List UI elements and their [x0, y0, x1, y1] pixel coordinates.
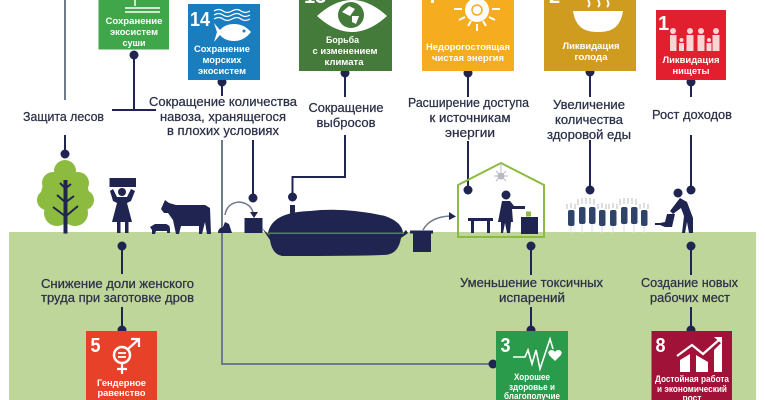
connector: women labour: [118, 242, 126, 334]
label: women labour: [41, 277, 194, 305]
SDG 1 card: нищеты: [672, 66, 710, 77]
label: healthy food: количества: [555, 113, 623, 127]
SDG 3 card: [496, 331, 568, 400]
label: income growth: Рост доходов: [652, 108, 732, 122]
label: healthy food: здоровой еды: [547, 128, 631, 142]
SDG 15 card: Сохранение: [106, 16, 162, 27]
label: toxic fumes: [460, 276, 604, 305]
SDG 1 card: Ликвидация: [662, 55, 720, 66]
SDG 14 card: 14: [190, 9, 211, 31]
SDG 14 card: морских: [202, 55, 242, 66]
connector: income: [686, 78, 696, 194]
label: new jobs: [641, 276, 739, 305]
SDG 2 card: [544, 0, 636, 71]
label: new jobs: рабочих мест: [650, 291, 730, 305]
ground panel: [9, 232, 756, 400]
SDG 5 card: [86, 331, 157, 400]
label: healthy food: [547, 98, 631, 142]
SDG 13 card: климата: [324, 57, 364, 68]
SDG 5 card: 5: [90, 335, 100, 357]
label: emissions reduction: выбросов: [316, 116, 376, 130]
icon: woman carrying wood: [110, 178, 136, 233]
label: women labour: Снижение доли женского: [41, 277, 194, 291]
label: manure reduction: Сокращение количества: [149, 95, 297, 109]
SDG 14 card: [188, 4, 260, 80]
label: emissions reduction: [308, 101, 384, 130]
label: energy access: [408, 96, 529, 140]
label: forest protection: Защита лесов: [23, 110, 104, 124]
label: manure reduction: в плохих условиях: [167, 124, 280, 138]
SDG 14 card: Сохранение: [194, 44, 250, 55]
icon: biogas digester: [262, 205, 408, 256]
connector: food: [586, 68, 594, 194]
SDG 14 card: экосистем: [198, 66, 246, 77]
SDG 1 card: [656, 10, 726, 80]
label: women labour: труда при заготовке дров: [41, 291, 194, 305]
SDG 15 card: суши: [122, 38, 146, 49]
connector: land ecosystems: [112, 50, 156, 110]
SDG 15 card: экосистем: [110, 27, 158, 38]
icon: outlet tank and arrow: [410, 212, 456, 252]
icon: tree: [37, 160, 94, 234]
label: manure reduction: навоза, хранящегося: [160, 110, 286, 124]
icon: green house with person: [458, 163, 544, 237]
SDG 8 card: 8: [656, 335, 666, 357]
SDG 5 card: Гендерное: [97, 378, 146, 389]
SDG 7 card: [422, 0, 514, 71]
SDG 2 card: Ликвидация: [562, 41, 620, 52]
connector: toxic fumes: [526, 242, 536, 334]
SDG 13 card: Борьба: [326, 35, 360, 46]
icon: pig: [150, 224, 170, 234]
label: emissions reduction: Сокращение: [308, 101, 384, 115]
SDG 3 card: Хорошее: [514, 372, 550, 383]
SDG 2 card: голода: [574, 52, 608, 63]
label: toxic fumes: испарений: [499, 291, 565, 305]
icon: farmer with watering can: [655, 188, 693, 233]
connector: marine and manure: [218, 78, 498, 368]
label: energy access: Расширение доступа: [408, 96, 529, 110]
SDG 3 card: здоровье и: [509, 382, 555, 393]
label: manure reduction: [149, 95, 297, 138]
connector: climate: [288, 68, 350, 202]
label: energy access: энергии: [445, 126, 495, 140]
SDG 13 card: [299, 0, 392, 71]
icon: cow: [161, 200, 211, 234]
SDG 5 card: равенство: [98, 388, 146, 399]
connector: jobs: [686, 242, 696, 334]
label: toxic fumes: Уменьшение токсичных: [460, 276, 604, 290]
icon: wheat: [567, 198, 648, 233]
connector: energy: [464, 68, 472, 194]
label: energy access: к источникам: [430, 111, 510, 125]
label: new jobs: Создание новых: [641, 276, 739, 290]
SDG 7 card: Недорогостоящая: [426, 42, 510, 53]
label: healthy food: Увеличение: [553, 98, 625, 112]
icon: manure heap and arrow: [218, 202, 262, 233]
SDG 13 card: с изменением: [312, 46, 378, 57]
connector: forest: [60, 0, 70, 158]
SDG 8 card: Достойная работа: [655, 374, 730, 385]
SDG 15 card: [98, 0, 169, 50]
SDG 3 card: 3: [500, 335, 510, 357]
SDG 1 card: 1: [658, 13, 669, 35]
SDG 7 card: чистая энергия: [432, 53, 504, 64]
SDG 8 card: [652, 331, 732, 400]
SDG 8 card: и экономический: [657, 384, 727, 395]
